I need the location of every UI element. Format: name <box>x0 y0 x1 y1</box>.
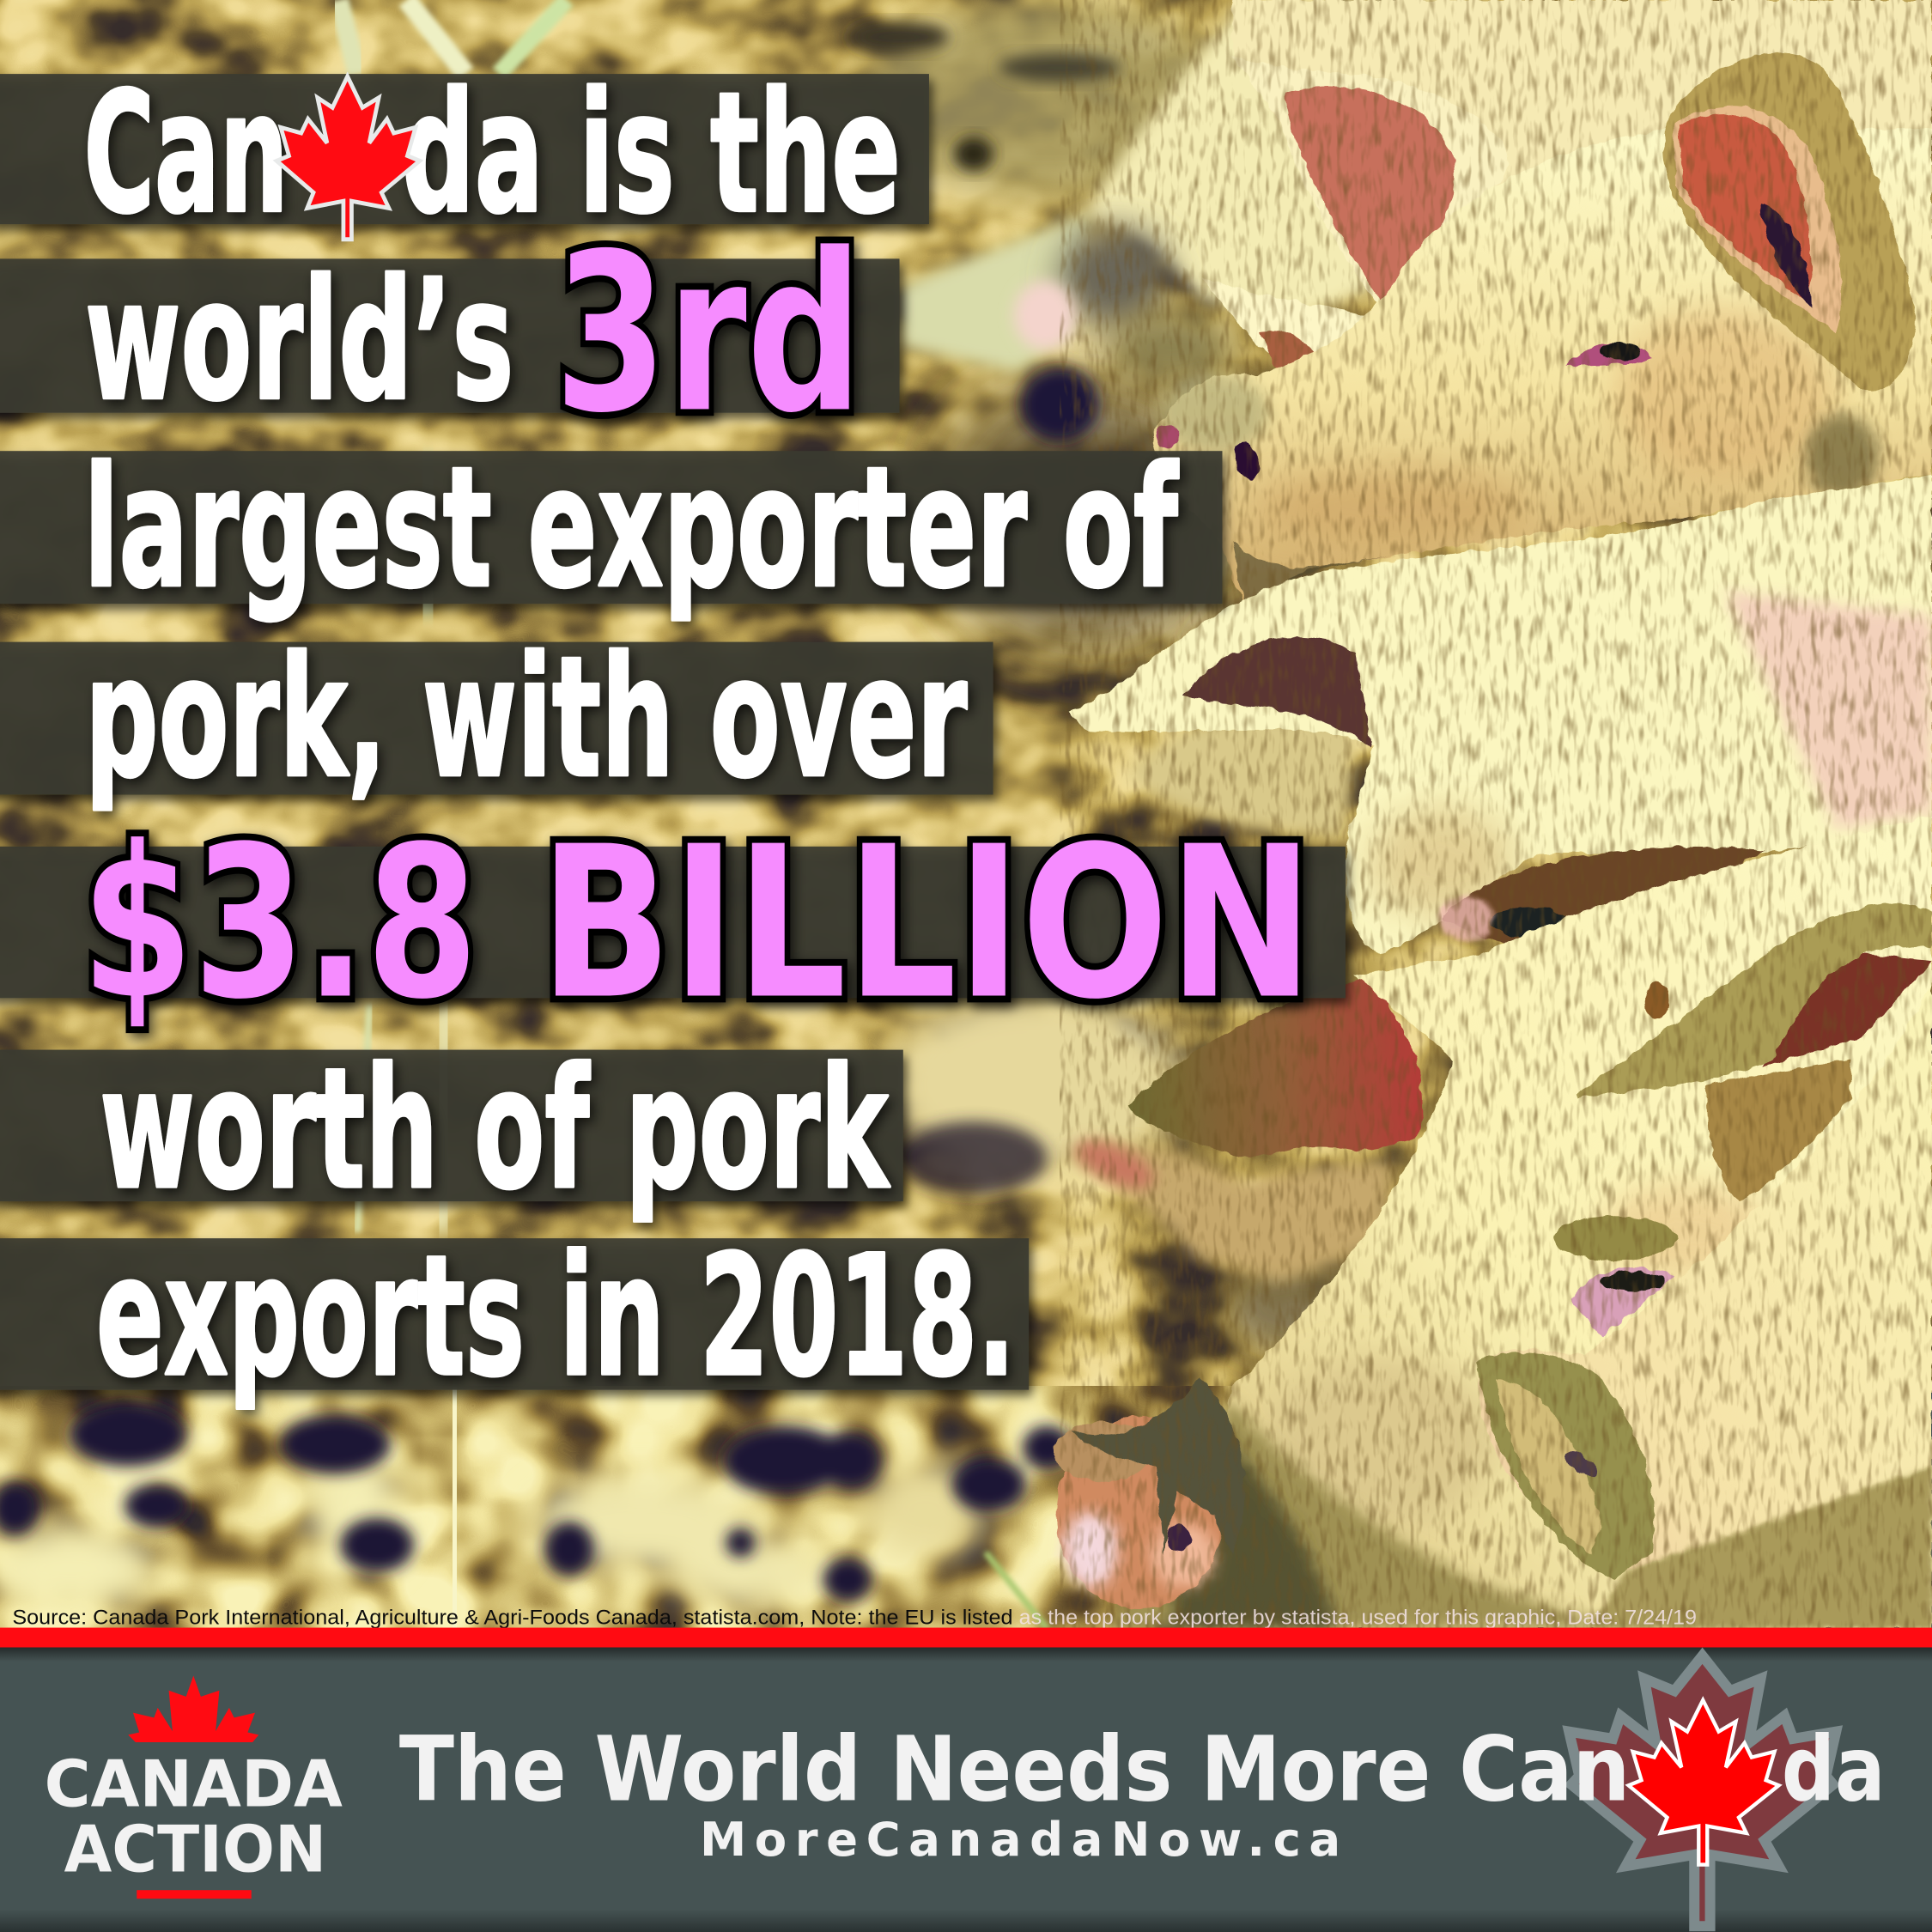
text band 1 <box>0 74 929 224</box>
text band 4 <box>0 642 993 795</box>
dark gap behind ear <box>1706 1060 1850 1201</box>
source note dark part: Source: Canada Pork International, Agriculture & Agri-Foods Canada, statista.com, Note: the EU is listed <box>12 1606 1013 1629</box>
muddy ground texture, upper <box>0 0 1932 1392</box>
logo word CANADA: CANADA <box>45 1747 343 1822</box>
dark patches in lower ground <box>0 1402 1072 1601</box>
front pig left ear <box>1127 980 1423 1158</box>
blurred pig behind, upper left of herd <box>901 0 1479 441</box>
source note light part: as the top pork exporter by statista, used for this graphic, Date: 7/24/19 <box>1019 1606 1697 1629</box>
logo word ACTION: ACTION <box>64 1813 326 1887</box>
text band 2 <box>0 258 900 413</box>
logo crown leaf <box>128 1676 258 1742</box>
logo: Canada Action <box>45 1676 343 1899</box>
icon: large faded maple leaf <box>1569 1656 1836 1926</box>
blurred pig snouts behind mid and lower pigs <box>1066 714 1392 1281</box>
sharp foreground pigs <box>1054 0 1932 1629</box>
bright patches in lower ground <box>0 1449 987 1613</box>
back pig body <box>1232 0 1932 234</box>
text band 3 <box>0 451 1222 604</box>
highlight: 3rd: 3rd <box>555 206 862 460</box>
text band 7 <box>0 1238 1029 1390</box>
icon: red maple leaf in slogan <box>1629 1700 1779 1865</box>
muddy ground texture, lower <box>0 1386 1232 1629</box>
grass stems <box>339 0 1048 1629</box>
out-of-focus ground tones <box>850 0 1392 1355</box>
footer background <box>0 1648 1932 1932</box>
red divider <box>0 1628 1932 1648</box>
top pig head <box>1152 130 1932 606</box>
muddy snout of front pig <box>1054 1377 1245 1609</box>
middle pig <box>1070 474 1932 955</box>
text band 5 <box>0 847 1346 998</box>
back pig ear <box>1201 56 1508 380</box>
headline line 1, end: da is the <box>402 56 901 250</box>
icon: maple leaf in headline <box>276 76 420 240</box>
highlight: $3.8: $3.8 <box>82 801 478 1045</box>
logo underline <box>137 1890 252 1899</box>
text band 6 <box>0 1050 903 1201</box>
slogan, start: The World Needs More Can <box>399 1716 1630 1821</box>
website: MoreCanadaNow.ca <box>700 1812 1340 1867</box>
top pig ear <box>1663 52 1916 391</box>
headline line 2: world’s <box>85 243 513 437</box>
highlight: BILLION: BILLION <box>540 801 1314 1045</box>
slogan, end: da <box>1782 1716 1885 1821</box>
headline panel <box>0 56 1346 1413</box>
foreground pig snout <box>1476 986 1932 1629</box>
footer panel <box>0 1628 1932 1932</box>
hair texture overlay <box>1060 0 1932 1629</box>
headline line 3: largest exporter of <box>84 431 1179 625</box>
headline line 1, start: Can <box>84 56 289 250</box>
front pig upper ear <box>1577 903 1932 1097</box>
headline line 4: pork, with over <box>85 621 967 815</box>
front pig head <box>1109 816 1932 1629</box>
headline line 7: exports in 2018. <box>96 1219 1015 1413</box>
source note <box>12 1606 1697 1629</box>
headline line 6: worth of pork <box>100 1032 890 1226</box>
